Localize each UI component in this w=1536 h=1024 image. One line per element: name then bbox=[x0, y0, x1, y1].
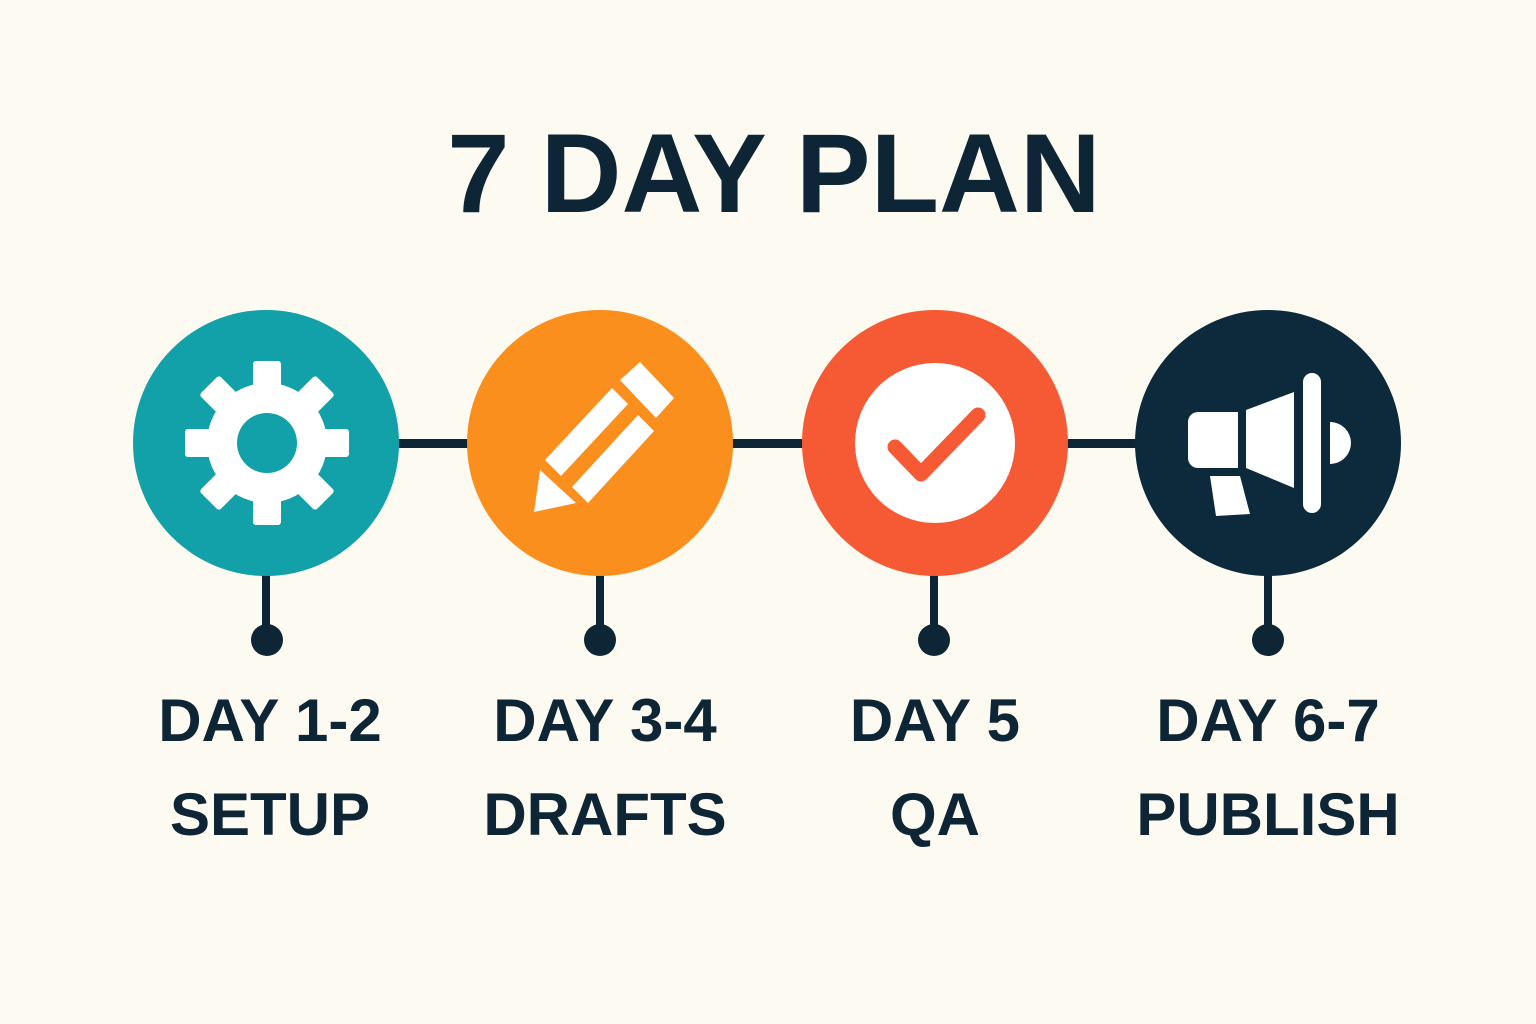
label: day 6-7 publish bbox=[1136, 687, 1400, 848]
label: day 1-2 setup bbox=[158, 687, 382, 848]
label: day 5 qa: QA bbox=[890, 781, 980, 848]
step 2 circle: drafts pencil bbox=[467, 310, 733, 656]
icon: megaphone bbox=[1188, 373, 1351, 516]
label: day 3-4 drafts: DAY 3-4 bbox=[493, 687, 717, 754]
step 3 circle: QA check bbox=[802, 310, 1068, 656]
label: day 6-7 publish: PUBLISH bbox=[1136, 781, 1400, 848]
label: day 3-4 drafts: DRAFTS bbox=[483, 781, 727, 848]
connector line bbox=[390, 439, 1150, 448]
label: day 3-4 drafts bbox=[483, 687, 727, 848]
title: 7 DAY PLAN bbox=[447, 111, 1101, 236]
icon: check bbox=[855, 363, 1015, 523]
label: day 6-7 publish: DAY 6-7 bbox=[1156, 687, 1380, 754]
label: day 1-2 setup: DAY 1-2 bbox=[158, 687, 382, 754]
icon: pencil bbox=[534, 362, 674, 512]
label: day 5 qa: DAY 5 bbox=[850, 687, 1020, 754]
step 1 circle: setup gear bbox=[133, 310, 399, 656]
icon: gear bbox=[151, 327, 383, 559]
label: day 1-2 setup: SETUP bbox=[170, 781, 370, 848]
step 4 circle: publish megaphone bbox=[1135, 310, 1401, 656]
label: day 5 qa bbox=[850, 687, 1020, 848]
